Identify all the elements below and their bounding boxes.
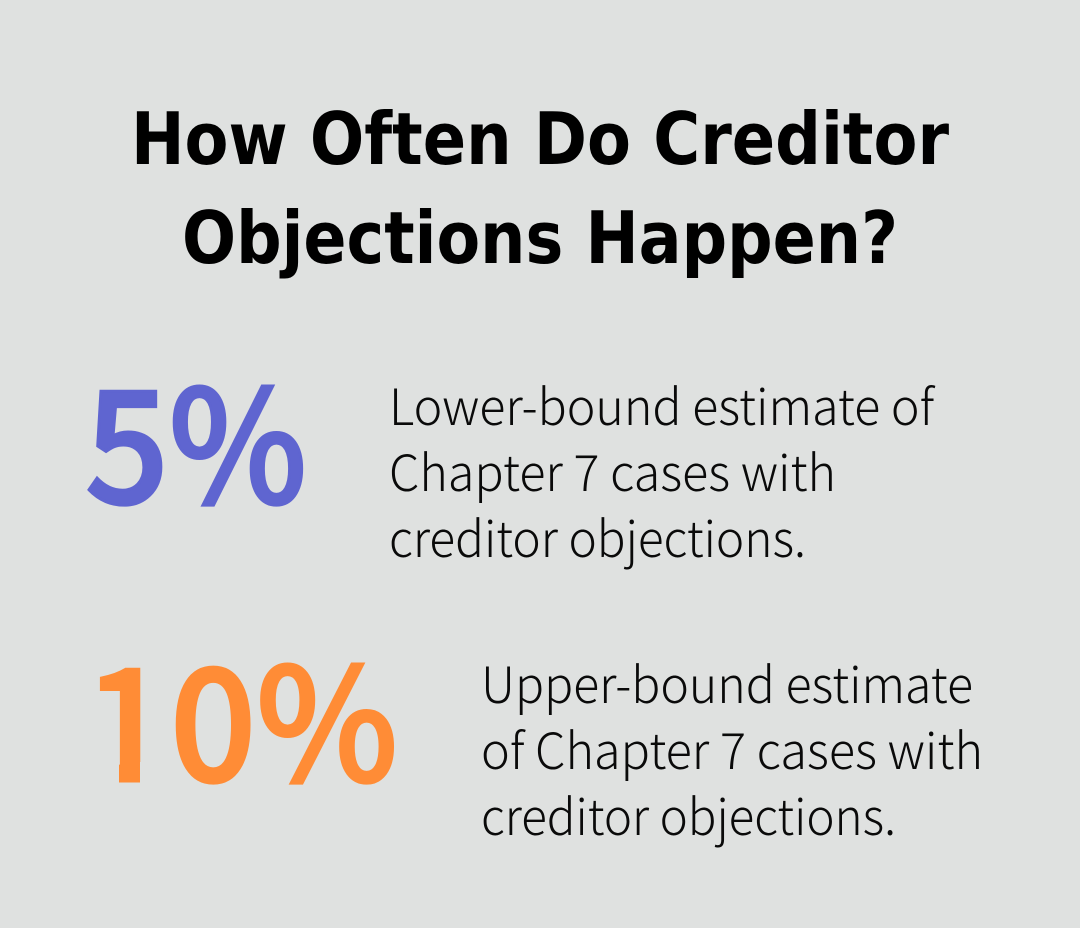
big number: 10%: 10% — [84, 600, 398, 826]
big number: 5%: 5% — [85, 322, 307, 548]
text block: lower-bound description: Chapter 7 cases with — [389, 434, 836, 506]
panel: 10% statistic — [84, 600, 983, 850]
text block: lower-bound description: Lower-bound estimate of — [389, 368, 936, 440]
text block: lower-bound description: creditor objections. — [389, 500, 806, 572]
text block: upper-bound description: Upper-bound estimate — [481, 646, 973, 718]
title — [131, 97, 949, 280]
text block: lower-bound description — [389, 368, 936, 572]
panel: 5% statistic — [85, 322, 936, 572]
text block: upper-bound description: creditor objections. — [481, 778, 896, 850]
text block: upper-bound description — [481, 646, 983, 850]
title: Objections Happen? — [182, 196, 898, 280]
title: How Often Do Creditor — [131, 97, 949, 181]
text block: upper-bound description: of Chapter 7 cases with — [481, 712, 983, 784]
